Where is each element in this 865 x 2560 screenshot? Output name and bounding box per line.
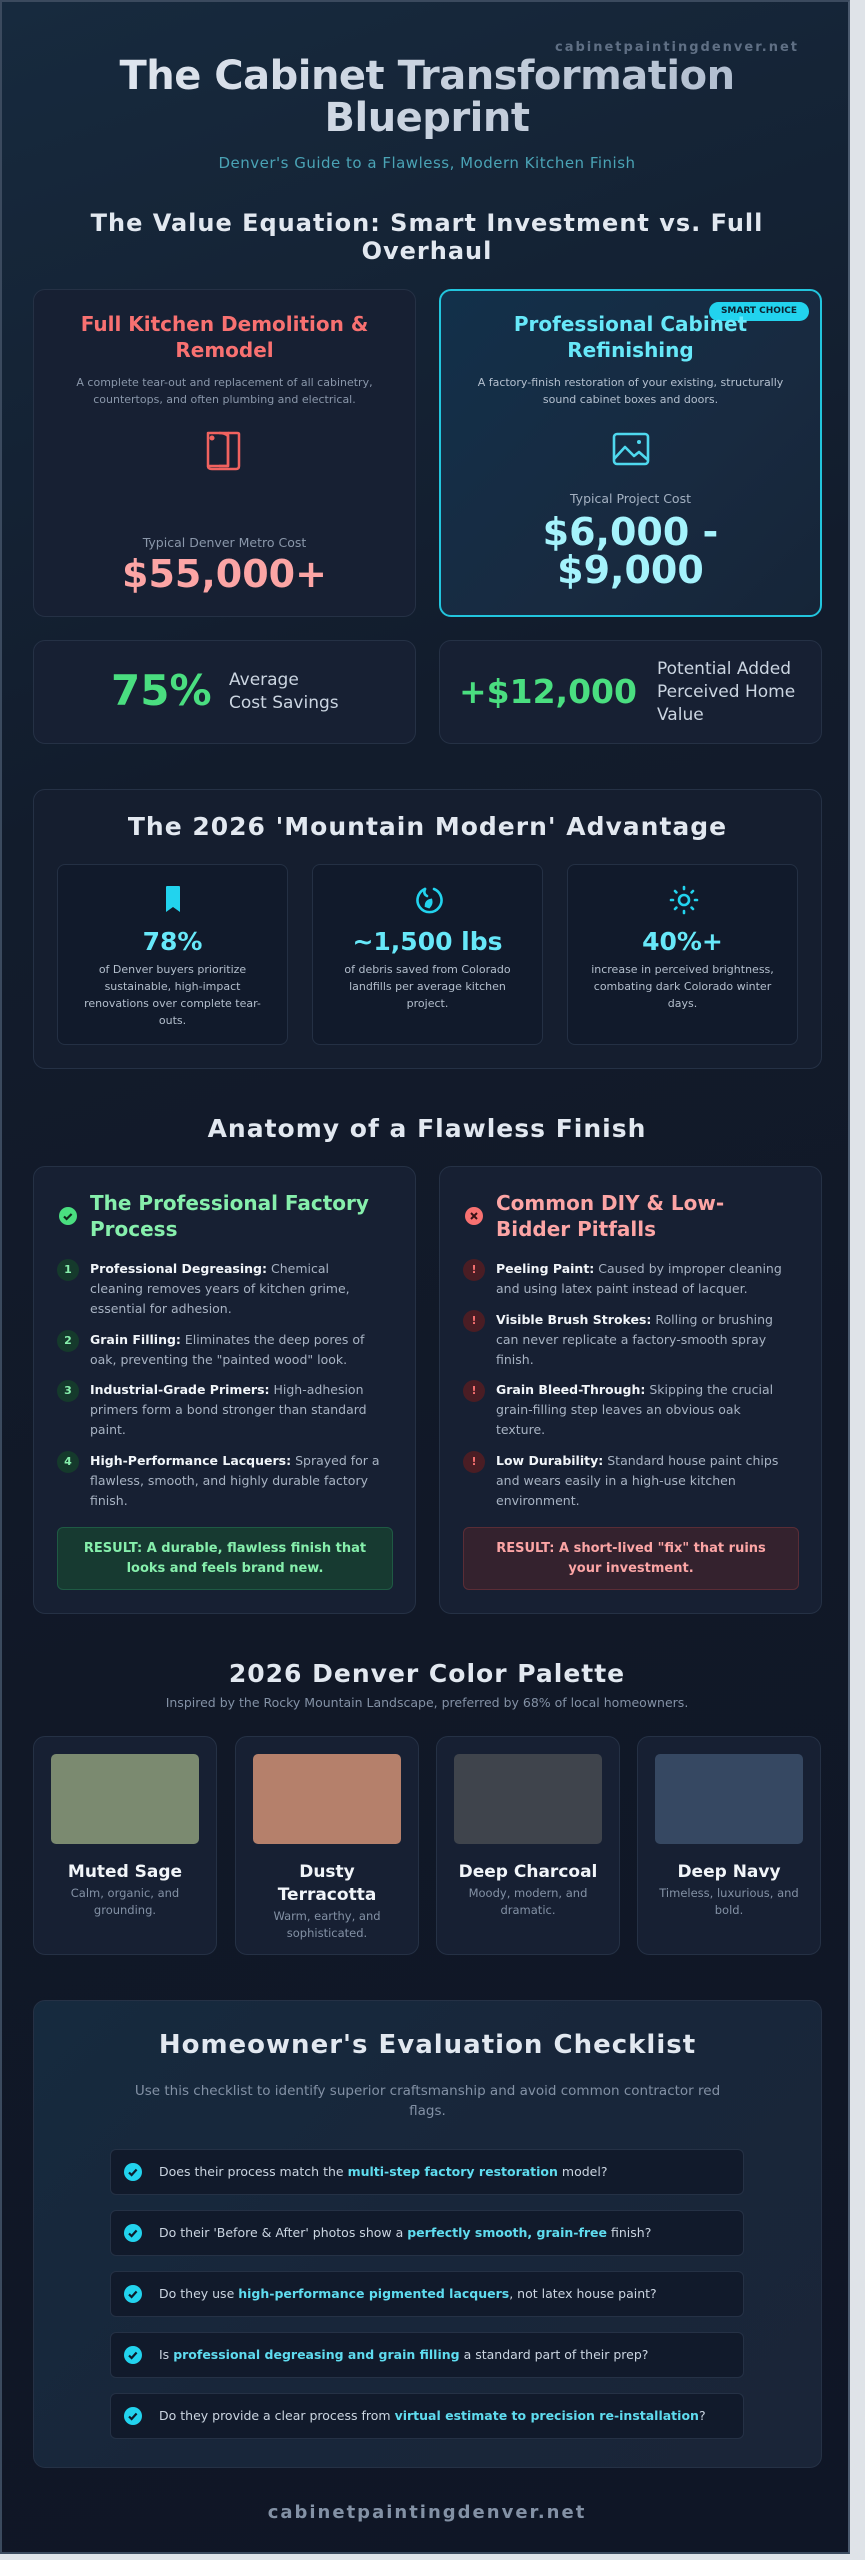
- card: 78%: [57, 864, 288, 1045]
- step 4: High-Performance Lacquers: Sprayed for a flawless, smooth, and highly durable factory finish.: [90, 1453, 380, 1508]
- header with check icon: Process: [90, 1217, 178, 1241]
- subtitle: Denver's Guide to a Flawless, Modern Kitchen Finish: [218, 154, 636, 172]
- checklist item 2: [110, 2210, 744, 2256]
- refinishing price: $9,000: [557, 548, 704, 592]
- icon: sun: [670, 886, 698, 914]
- pitfall 1: !: [471, 1263, 477, 1276]
- title: Blueprint: [324, 95, 529, 141]
- badge: smart choice: SMART CHOICE: [721, 306, 797, 316]
- icon: recycle/flame: [416, 888, 443, 914]
- palette subtitle: Inspired by the Rocky Mountain Landscape, preferred by 68% of local homeowners.: [166, 1695, 688, 1710]
- swatch card: dusty terracotta: Dusty: [299, 1862, 355, 1882]
- refinishing cost label: Typical Project Cost: [570, 491, 691, 506]
- result box: RESULT: A durable, flawless finish that looks and feels brand new.: [84, 1541, 366, 1576]
- panel: diy pitfalls: [439, 1166, 822, 1614]
- panel: professional process: [33, 1166, 416, 1614]
- pitfall 4: Low Durability: Standard house paint chips and wears easily in a high-use kitchen environment.: [496, 1453, 778, 1508]
- stat label: [657, 659, 795, 725]
- result box: [463, 1527, 799, 1590]
- stat label: [229, 670, 339, 713]
- stat label: Average: [229, 670, 299, 690]
- mountain heading: The 2026 'Mountain Modern' Advantage: [128, 812, 727, 841]
- refinishing price: $6,000 -: [543, 510, 718, 554]
- stat label: Potential Added: [657, 659, 791, 679]
- stat: home value: [439, 640, 822, 744]
- checklist item 2: Do their 'Before & After' photos show a perfectly smooth, grain-free finish?: [159, 2225, 651, 2240]
- step 3: 3: [64, 1384, 72, 1397]
- heading: value equation: Overhaul: [362, 237, 492, 265]
- stat number 75%: 75%: [111, 666, 212, 715]
- pitfall 3: Grain Bleed-Through: Skipping the crucial grain-filling step leaves an obvious oak texture.: [496, 1382, 773, 1437]
- icon: door: [206, 432, 240, 470]
- card: 40%: [567, 864, 798, 1045]
- title: [2, 55, 852, 139]
- swatch card: muted sage: Calm, organic, and grounding.: [71, 1886, 179, 1917]
- card: 1500 lbs: [312, 864, 543, 1045]
- swatch card: deep charcoal: [436, 1736, 620, 1955]
- checklist item 1: [110, 2149, 744, 2195]
- remodel price: $55,000+: [122, 552, 327, 596]
- panel: professional refinishing: [439, 289, 822, 617]
- step 1: 1: [64, 1263, 72, 1276]
- checklist item 3: [110, 2271, 744, 2317]
- header with x icon: Common DIY & Low-: [496, 1191, 724, 1215]
- checklist item 1: Does their process match the multi-step factory restoration model?: [159, 2164, 607, 2179]
- heading: color palette: 2026 Denver Color Palette: [229, 1659, 625, 1688]
- stat label: Cost Savings: [229, 693, 339, 713]
- stat 1500: ~1,500 lbs: [352, 927, 503, 956]
- heading: anatomy: Anatomy of a Flawless Finish: [208, 1114, 646, 1143]
- panel: full remodel: [33, 289, 416, 617]
- desc: increase in perceived brightness, combating dark Colorado winter days.: [591, 963, 774, 1010]
- heading: value equation: [90, 209, 763, 265]
- stat: cost savings: [33, 640, 416, 744]
- result box: [57, 1527, 393, 1590]
- swatch card: muted sage: [33, 1736, 217, 1955]
- checklist item 5: [110, 2393, 744, 2439]
- swatch card: deep charcoal: Moody, modern, and dramatic.: [469, 1886, 587, 1917]
- checklist item 4: [110, 2332, 744, 2378]
- refinishing title: [514, 312, 747, 362]
- swatch card: muted sage: Muted Sage: [68, 1862, 182, 1882]
- pitfall 2: Visible Brush Strokes: Rolling or brushing can never replicate a factory-smooth spray finish.: [496, 1312, 773, 1367]
- checklist item 5: Do they provide a clear process from virtual estimate to precision re-installation?: [159, 2408, 706, 2423]
- remodel title: [81, 312, 368, 362]
- desc: of debris saved from Colorado landfills per average kitchen project.: [344, 963, 511, 1010]
- panel: evaluation checklist: [33, 2000, 822, 2468]
- stat number +$12,000: +$12,000: [459, 672, 637, 711]
- pitfall 3: !: [471, 1384, 477, 1397]
- stat 40%: 40%+: [642, 927, 723, 956]
- pitfall 4: !: [471, 1455, 477, 1468]
- pitfall 1: Peeling Paint: Caused by improper cleaning and using latex paint instead of lacquer.: [496, 1261, 782, 1296]
- remodel title: Remodel: [175, 338, 274, 362]
- remodel description: A complete tear-out and replacement of all cabinetry, countertops, and often plumbing and electrical.: [76, 376, 373, 406]
- checklist item 3: Do they use high-performance pigmented lacquers, not latex house paint?: [159, 2286, 657, 2301]
- refinishing title: Refinishing: [567, 338, 694, 362]
- panel: mountain modern advantage: [33, 789, 822, 1069]
- checklist item 4: Is professional degreasing and grain filling a standard part of their prep?: [159, 2347, 648, 2362]
- stat label: Value: [657, 705, 704, 725]
- header with check icon: The Professional Factory: [90, 1191, 369, 1215]
- footer: cabinetpaintingdenver.net: [268, 2502, 586, 2523]
- step 3: Industrial-Grade Primers: High-adhesion primers form a bond stronger than standard paint.: [90, 1382, 367, 1437]
- swatch card: dusty terracotta: Terracotta: [278, 1885, 376, 1905]
- refinishing title: Professional Cabinet: [514, 312, 747, 336]
- checklist heading: Homeowner's Evaluation Checklist: [159, 2030, 696, 2060]
- badge: smart choice: [709, 302, 809, 321]
- swatch card: deep navy: Deep Navy: [677, 1862, 781, 1882]
- icon: image: [612, 432, 650, 466]
- icon: bookmark: [166, 886, 180, 912]
- title: The Cabinet Transformation: [119, 53, 735, 99]
- header with x icon: [465, 1191, 724, 1241]
- header with check icon: [59, 1191, 369, 1241]
- remodel cost label: Typical Denver Metro Cost: [143, 535, 306, 550]
- refinishing description: A factory-finish restoration of your existing, structurally sound cabinet boxes and doors.: [478, 376, 783, 406]
- swatch card: deep navy: [637, 1736, 821, 1955]
- desc: of Denver buyers prioritize sustainable, high-impact renovations over complete tear-outs.: [84, 963, 261, 1027]
- step 4: 4: [64, 1455, 72, 1468]
- site label top: cabinetpaintingdenver.net: [555, 40, 799, 55]
- stat 78%: 78%: [143, 927, 202, 956]
- swatch card: deep charcoal: Deep Charcoal: [459, 1862, 597, 1882]
- swatch card: dusty terracotta: [235, 1736, 419, 1955]
- remodel title: Full Kitchen Demolition &: [81, 312, 368, 336]
- swatch card: deep navy: Timeless, luxurious, and bold.: [659, 1886, 799, 1917]
- step 2: Grain Filling: Eliminates the deep pores of oak, preventing the "painted wood" look.: [90, 1332, 364, 1367]
- refinishing price: [543, 510, 718, 592]
- swatch card: dusty terracotta: Warm, earthy, and sophisticated.: [273, 1909, 381, 1940]
- pitfall 2: !: [471, 1314, 477, 1327]
- step 1: Professional Degreasing: Chemical cleaning removes years of kitchen grime, essential for adhesion.: [90, 1261, 350, 1316]
- result box: RESULT: A short-lived "fix" that ruins your investment.: [496, 1541, 766, 1576]
- heading: value equation: The Value Equation: Smart Investment vs. Full: [91, 209, 763, 237]
- step 2: 2: [64, 1334, 72, 1347]
- header with x icon: Bidder Pitfalls: [496, 1217, 656, 1241]
- stat label: Perceived Home: [657, 682, 795, 702]
- checklist description: Use this checklist to identify superior craftsmanship and avoid common contractor red flags.: [135, 2083, 720, 2119]
